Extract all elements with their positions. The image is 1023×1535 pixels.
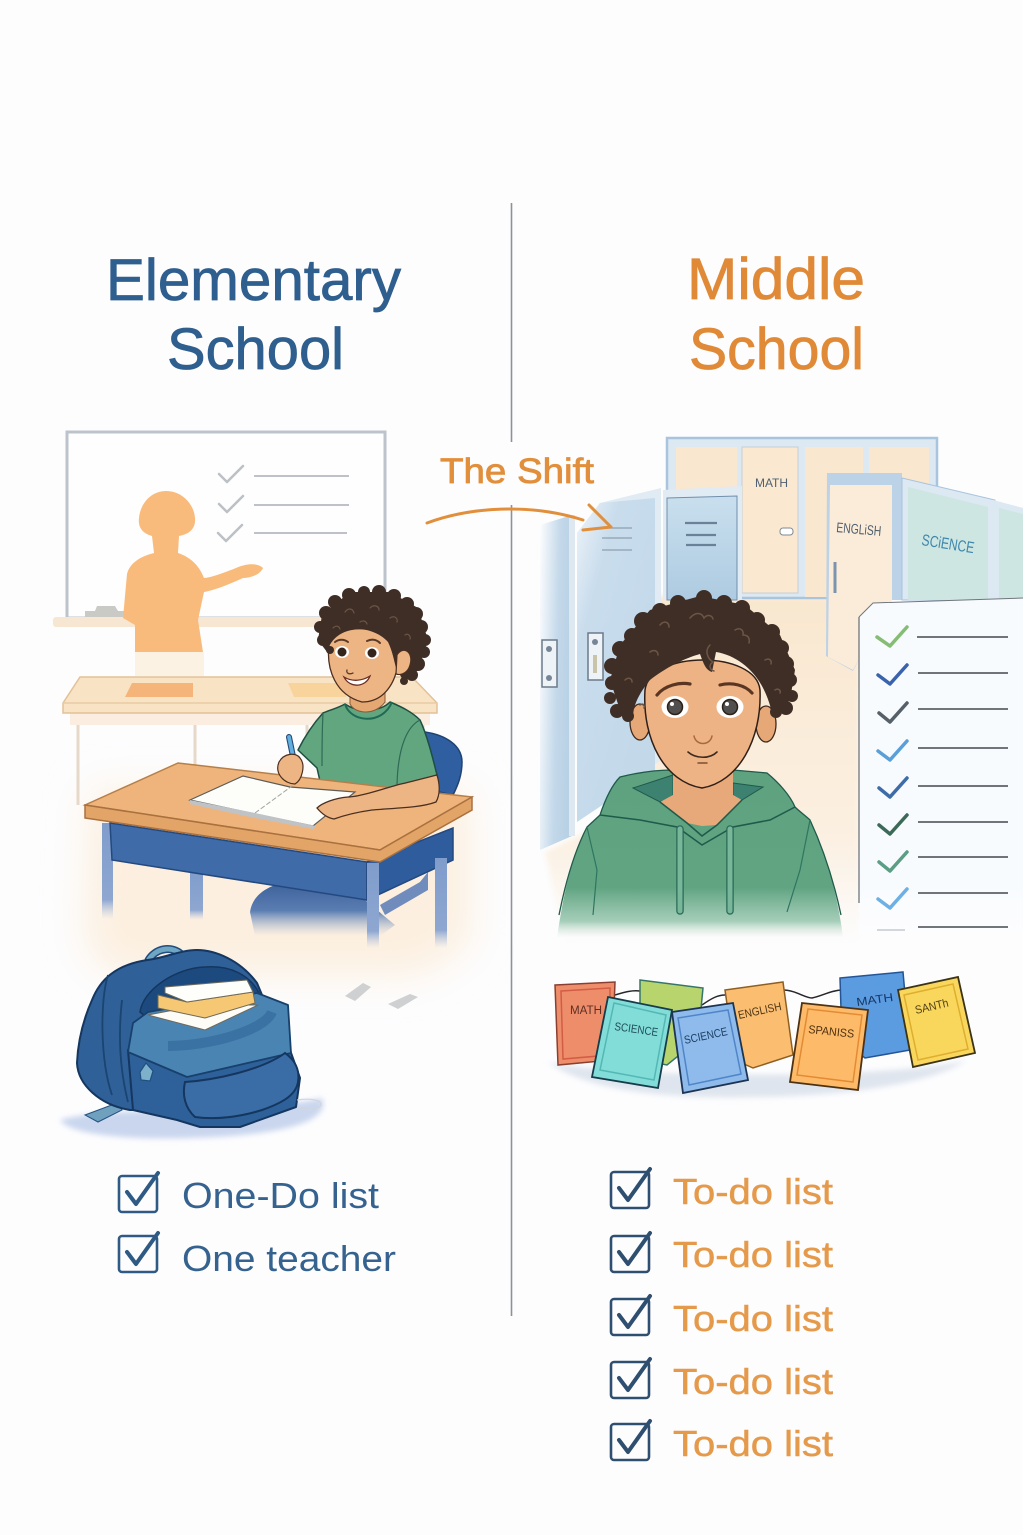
- item 5: To-do list: [673, 1423, 833, 1464]
- chair seat: [380, 872, 428, 915]
- chair back: [425, 732, 462, 795]
- whiteboard: [67, 432, 385, 618]
- hood seam: [600, 807, 795, 845]
- title: Elementary School: School: [167, 317, 344, 382]
- book: science blue: [672, 1003, 748, 1093]
- arrow: the shift: [427, 505, 611, 530]
- book: yellow: SANTh: [914, 998, 950, 1017]
- back wall: MATH: [755, 476, 788, 490]
- illustration: middle school hallway: [540, 438, 1023, 945]
- books row: [548, 972, 975, 1097]
- right arm: [317, 775, 439, 819]
- t-shirt: [298, 702, 437, 790]
- checklist paper: [859, 598, 1023, 935]
- eyes and smile: [335, 646, 349, 658]
- ears: [630, 704, 776, 742]
- book: english orange: ENGLISH: [737, 1001, 783, 1022]
- book: english orange: [725, 982, 793, 1068]
- item 1: [611, 1169, 833, 1212]
- checklist: elementary: [119, 1173, 396, 1279]
- book: math red: [555, 982, 615, 1065]
- book: spanish orange: [790, 1003, 868, 1090]
- Science door: SCiENCE: [920, 532, 975, 557]
- book: math blue: MATH: [856, 992, 894, 1009]
- item 2: To-do list: [673, 1234, 833, 1275]
- item: One teacher: One teacher: [182, 1238, 396, 1279]
- student jeans: [250, 885, 395, 936]
- lower body: [128, 1050, 300, 1127]
- teacher skirt: [135, 652, 204, 676]
- neck: [660, 770, 742, 835]
- face: [328, 629, 398, 702]
- item 3: To-do list: [673, 1298, 833, 1339]
- teacher silhouette: [123, 491, 263, 652]
- backpack: [60, 949, 323, 1138]
- boy with hoodie: [557, 590, 843, 938]
- hair: [604, 590, 798, 722]
- book: science teal: SCIENCE: [614, 1021, 659, 1039]
- item 4: To-do list: [673, 1361, 833, 1402]
- label: The Shift: The Shift: [440, 452, 594, 491]
- title: Middle School: School: [689, 317, 864, 382]
- title: Middle School: Middle: [687, 247, 865, 312]
- item 2: [611, 1233, 833, 1275]
- top loop: [148, 949, 182, 961]
- title: Elementary School: [106, 248, 401, 382]
- item 5: [611, 1421, 833, 1464]
- teacher desk: [63, 677, 437, 805]
- item 1: To-do list: [673, 1171, 833, 1212]
- item: One-Do list: One-Do list: [182, 1175, 379, 1216]
- book: green: [640, 980, 703, 1065]
- item 4: [611, 1359, 833, 1402]
- hair: [314, 585, 431, 685]
- checklist: middle school: [611, 1169, 833, 1464]
- hood inside: [633, 775, 763, 802]
- ear: [396, 650, 411, 675]
- student desk: [85, 763, 472, 948]
- item 3: [611, 1296, 833, 1339]
- center divider: [510, 203, 512, 1316]
- buckle: [140, 1063, 153, 1081]
- bottom strap: [85, 1103, 122, 1122]
- hallway floor: [545, 596, 860, 945]
- floor string: [297, 1099, 321, 1109]
- Science door: [902, 478, 1023, 600]
- English door: ENGLiSH: [836, 519, 882, 539]
- student: [298, 585, 437, 790]
- left hand with pen: [278, 737, 303, 784]
- book: spanish orange: SPANISS: [808, 1024, 855, 1041]
- shadow under books: [548, 1060, 967, 1097]
- shadow: [60, 1098, 323, 1138]
- book: yellow: [898, 977, 975, 1067]
- lockers: [540, 486, 742, 850]
- top compartment: [128, 993, 291, 1077]
- soft background glow: [85, 790, 470, 975]
- whiteboard tray: [53, 606, 343, 627]
- paper scraps: [345, 983, 418, 1009]
- opening: [140, 967, 259, 1020]
- front pocket: [184, 1053, 298, 1118]
- book: math blue: [840, 972, 910, 1058]
- item: One teacher: [119, 1233, 396, 1279]
- book: science teal: [592, 997, 672, 1088]
- eyes: [662, 696, 744, 718]
- hoodie body: [557, 770, 843, 938]
- hoodie strings: [680, 829, 730, 911]
- title: Middle School: [687, 247, 865, 382]
- neck: [350, 690, 385, 712]
- back wall: [667, 438, 937, 598]
- English door: [826, 473, 902, 671]
- open book: [190, 776, 355, 829]
- brows, nose and mouth: [657, 683, 752, 763]
- book: science blue: SCIENCE: [683, 1026, 729, 1047]
- face: [645, 660, 760, 788]
- title: Elementary School: Elementary: [106, 248, 401, 313]
- item: One-Do list: [119, 1173, 379, 1216]
- book: math red: MATH: [570, 1005, 602, 1017]
- back body: [77, 950, 262, 1110]
- illustration: elementary classroom: [53, 432, 472, 975]
- books in backpack: [148, 980, 258, 1030]
